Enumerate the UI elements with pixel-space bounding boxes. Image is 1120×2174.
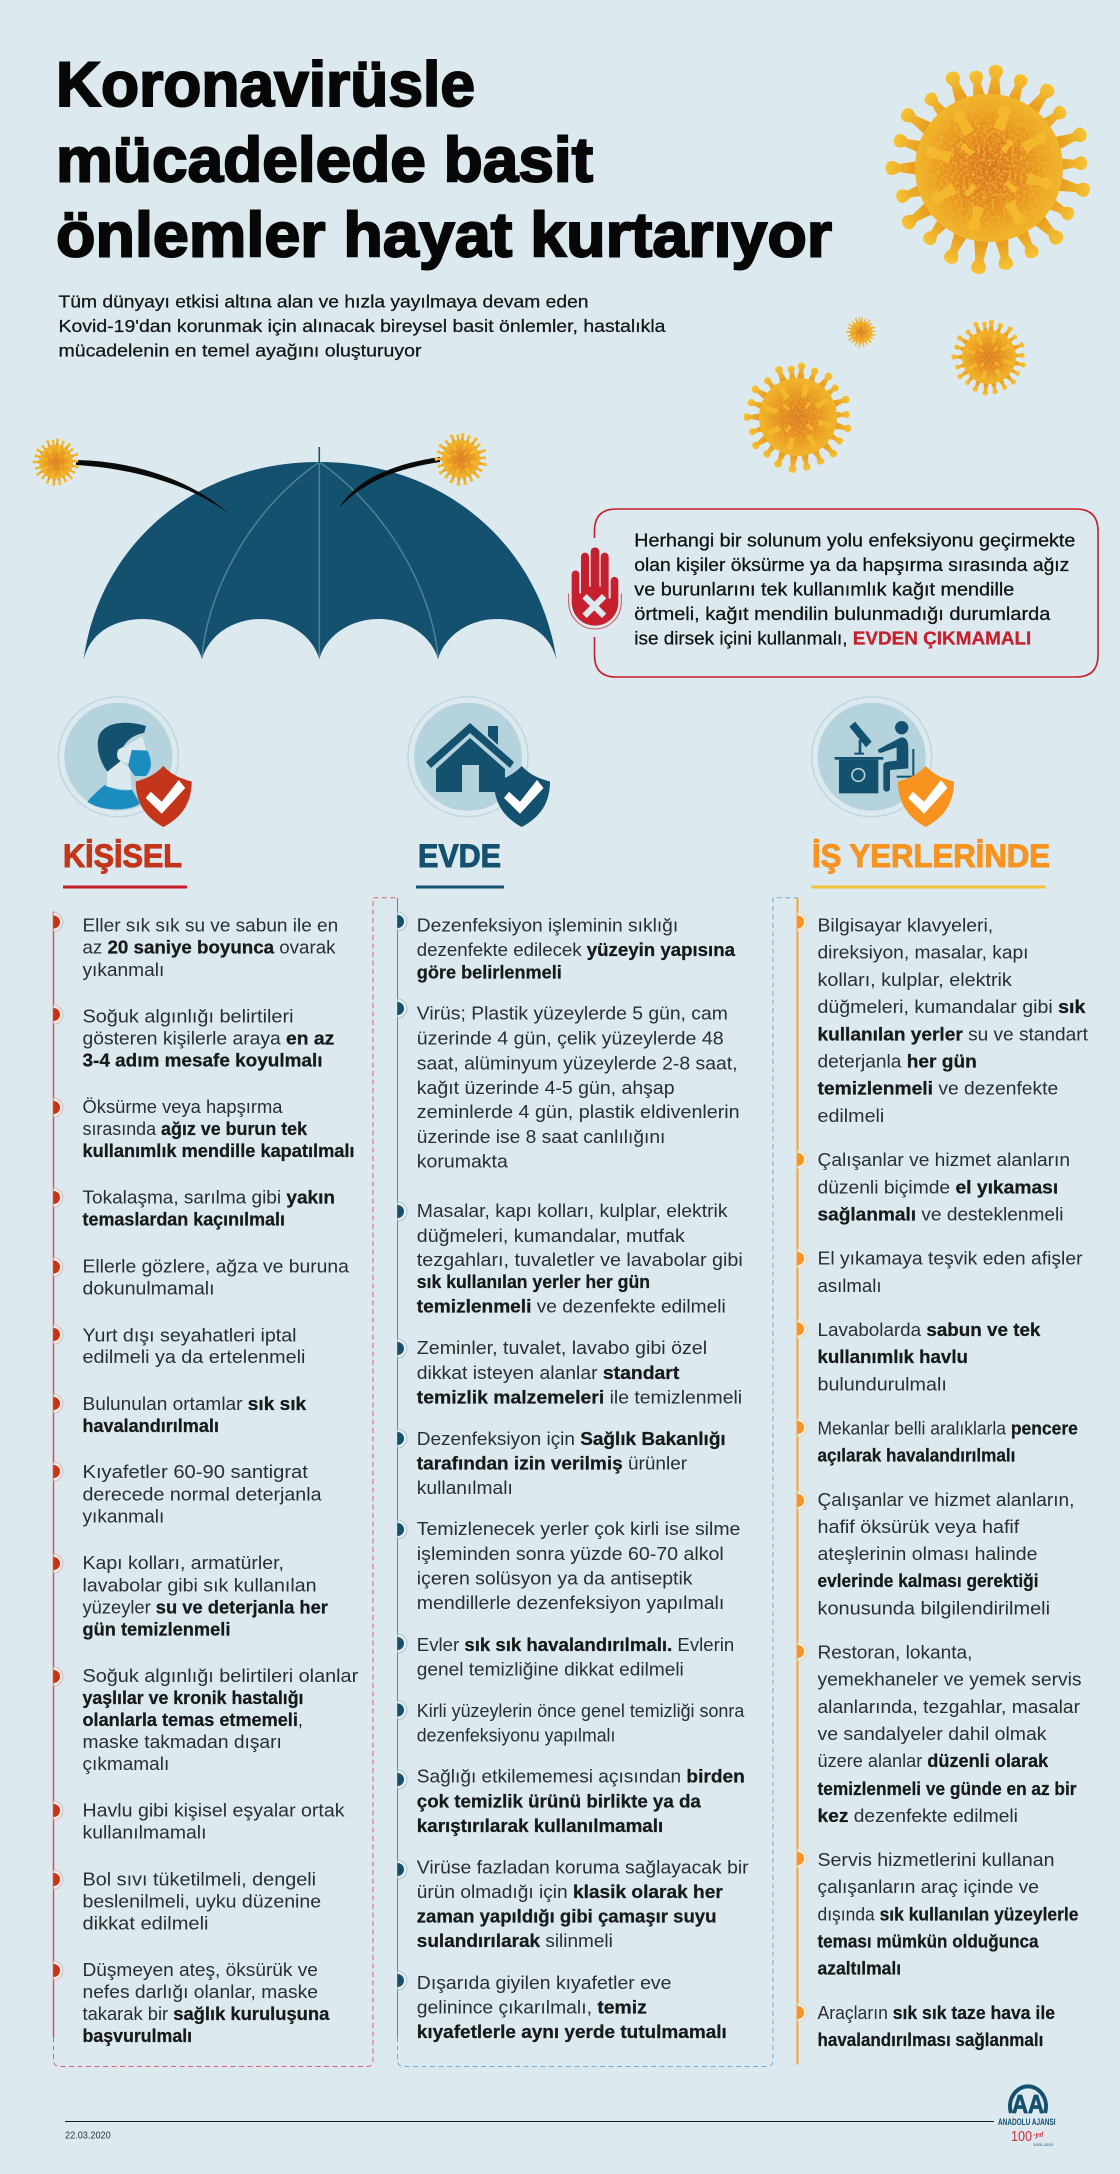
item: çok temizlik ürünü birlikte ya da [417, 1791, 702, 1811]
item: zeminlerde 4 gün, plastik eldivenlerin [417, 1102, 740, 1122]
item [398, 1700, 745, 1745]
item: kağıt üzerinde 4-5 gün, ahşap [417, 1078, 675, 1098]
item: düğmeleri, kumandalar, mutfak [417, 1226, 686, 1246]
item: Kıyafetler 60-90 santigrat [82, 1462, 308, 1482]
item: Kirli yüzeylerin önce genel temizliği sonra [417, 1701, 745, 1721]
item: Eller sık sık su ve sabun ile en [82, 915, 338, 935]
item: direksiyon, masalar, kapı [818, 943, 1028, 963]
icon: large virus [886, 64, 1092, 275]
item: kullanılmalı [417, 1478, 513, 1498]
item: havalandırılmalı [82, 1416, 219, 1436]
item: Bulunulan ortamlar sık sık [82, 1394, 307, 1414]
item: yemekhaneler ve yemek servis [818, 1670, 1082, 1690]
item [398, 1201, 743, 1317]
item: Kapı kolları, armatürler, [82, 1553, 284, 1573]
item [54, 1666, 358, 1774]
umbrella tip [318, 447, 320, 463]
item [398, 1429, 726, 1498]
panel: iş yerlerinde [798, 697, 1088, 2065]
list: iş yerlerinde [798, 912, 1088, 2050]
item: maske takmadan dışarı [82, 1732, 282, 1752]
item: Düşmeyen ateş, öksürük ve [82, 1960, 318, 1980]
item: Soğuk algınlığı belirtileri olanlar [82, 1666, 358, 1686]
item: tarafından izin verilmiş ürünler [417, 1454, 687, 1474]
item: Virüse fazladan koruma sağlayacak bir [417, 1858, 749, 1878]
item: dezenfekte edilecek yüzeyin yapısına [417, 940, 736, 960]
item: üzerinde 4 gün, çelik yüzeylerde 48 [417, 1029, 724, 1049]
item: Temizlenecek yerler çok kirli ise silme [417, 1519, 740, 1539]
icon: virus above callout [743, 362, 852, 473]
item [398, 1519, 740, 1613]
callout text: Herhangi bir solunum yolu enfeksiyonu geçirmekte [634, 531, 1075, 551]
item: Bol sıvı tüketilmeli, dengeli [82, 1870, 316, 1890]
icon: virus right on strand [435, 433, 487, 486]
item: yüzeyler su ve deterjanla her [82, 1598, 328, 1618]
item [398, 1767, 745, 1836]
item [798, 912, 1088, 1126]
item: Yurt dışı seyahatleri iptal [82, 1325, 296, 1345]
item [54, 1801, 346, 1842]
logo: Anadolu Ajansı: 1920-2020 [1033, 2142, 1054, 2147]
item: yıkanmalı [82, 960, 164, 980]
item: karıştırılarak kullanılmamalı [417, 1816, 663, 1836]
item: temizlenmeli ve dezenfekte edilmeli [417, 1297, 726, 1317]
item: havalandırılması sağlanmalı [818, 2030, 1043, 2050]
umbrella canopy [84, 462, 556, 660]
item: teması mümkün olduğunca [818, 1932, 1039, 1952]
item: asılmalı [818, 1276, 882, 1296]
intro text: Tüm dünyayı etkisi altına alan ve hızla yayılmaya devam eden [58, 292, 588, 312]
item: Soğuk algınlığı belirtileri [82, 1006, 294, 1026]
item: alanlarında, tezgahlar, masalar [818, 1697, 1080, 1717]
item [54, 1188, 335, 1230]
item [54, 1553, 328, 1639]
item: dokunulmamalı [82, 1279, 214, 1299]
date: 22.03.2020 [65, 2130, 111, 2142]
item: yaşlılar ve kronik hastalığı [82, 1688, 304, 1708]
virus strand right [339, 457, 440, 508]
item: gelinince çıkarılmalı, temiz [417, 1998, 647, 2018]
item [54, 1005, 334, 1070]
item: ateşlerinin olması halinde [818, 1544, 1038, 1564]
item [398, 912, 736, 982]
item [798, 1418, 1078, 1466]
item [798, 2003, 1055, 2050]
panel frame: kişisel [54, 898, 398, 2067]
title [56, 50, 832, 270]
item [398, 999, 740, 1172]
item: kullanımlık mendille kapatılmalı [82, 1141, 354, 1161]
item: zaman yapıldığı gibi çamaşır suyu [417, 1906, 716, 1926]
umbrella illustration [32, 433, 556, 660]
icon: office worker [812, 697, 954, 827]
item: kıyafetlerle aynı yerde tutulmamalı [417, 2022, 727, 2042]
item: deterjanla her gün [818, 1052, 977, 1072]
item: az 20 saniye boyunca ovarak [82, 938, 337, 958]
item: açılarak havalandırılmalı [818, 1446, 1015, 1466]
item: Araçların sık sık taze hava ile [818, 2003, 1055, 2023]
item: Tokalaşma, sarılma gibi yakın [82, 1188, 335, 1208]
item [398, 1858, 749, 1951]
item: derecede normal deterjanla [82, 1484, 323, 1504]
item: 3-4 adım mesafe koyulmalı [82, 1050, 322, 1070]
item: Dezenfeksiyon işleminin sıklığı [417, 915, 678, 935]
item: olanlarla temas etmemeli, [82, 1710, 303, 1730]
icon: person with mask [58, 697, 192, 827]
item: düzenli biçimde el yıkaması [818, 1178, 1058, 1198]
item: temaslardan kaçınılmalı [82, 1210, 285, 1230]
item: Dışarıda giyilen kıyafetler eve [417, 1973, 671, 1993]
virus strand left [76, 460, 229, 514]
panel: evde [398, 697, 798, 2067]
item: gün temizlenmeli [82, 1619, 230, 1639]
title: önlemler hayat kurtarıyor [56, 200, 832, 270]
callout text: ve burunlarını tek kullanımlık kağıt mendille [634, 580, 1014, 600]
icon: house [408, 697, 550, 827]
item: dikkat isteyen alanlar standart [417, 1363, 679, 1383]
item: dikkat edilmeli [82, 1913, 208, 1933]
item: nefes darlığı olanlar, maske [82, 1982, 318, 2002]
item [398, 1634, 734, 1680]
item [54, 1870, 321, 1933]
logo: Anadolu Ajansı: -yıl [1033, 2132, 1044, 2139]
icon: virus left on strand [32, 438, 79, 486]
logo: Anadolu Ajansı [998, 2086, 1056, 2147]
title: mücadelede basit [56, 126, 593, 196]
callout text: örtmeli, kağıt mendilin bulunmadığı durumlarda [634, 604, 1051, 624]
heading: evde: EVDE [418, 838, 501, 874]
item: evlerinde kalması gerektiği [818, 1571, 1038, 1591]
callout text [634, 531, 1075, 648]
item: Servis hizmetlerini kullanan [818, 1850, 1054, 1870]
item: Öksürme veya hapşırma [82, 1097, 283, 1117]
umbrella ribs [202, 447, 438, 657]
item [398, 1338, 742, 1408]
item [798, 1642, 1082, 1826]
item [54, 1394, 307, 1436]
callout: warning [569, 509, 1098, 677]
item: başvurulmalı [82, 2026, 192, 2046]
item [798, 1849, 1078, 1979]
icon: stop hand [569, 547, 621, 629]
item: kullanımlık havlu [818, 1347, 968, 1367]
item [398, 1971, 727, 2042]
intro text [58, 292, 666, 360]
logo: Anadolu Ajansı: ANADOLU AJANSI [998, 2117, 1056, 2128]
item: kullanılmamalı [82, 1822, 206, 1842]
item: Virüs; Plastik yüzeylerde 5 gün, cam [417, 1004, 728, 1024]
item [54, 1097, 354, 1161]
item: Restoran, lokanta, [818, 1642, 972, 1662]
item: Sağlığı etkilememesi açısından birden [417, 1767, 745, 1787]
item: edilmeli [818, 1106, 884, 1126]
heading underline [811, 886, 1046, 888]
item: çıkmamalı [82, 1754, 169, 1774]
panel line [796, 898, 798, 2065]
item: saat, alüminyum yüzeylerde 2-8 saat, [417, 1053, 738, 1073]
item [798, 1490, 1074, 1618]
callout text: olan kişiler öksürme ya da hapşırma sırasında ağız [634, 555, 1069, 575]
item: düğmeleri, kumandalar gibi sık [818, 997, 1086, 1017]
item: tezgahları, tuvaletler ve lavabolar gibi [417, 1250, 743, 1270]
item: temizlenmeli ve günde en az bir [818, 1779, 1076, 1799]
item: kolları, kulplar, elektrik [818, 970, 1013, 990]
item [798, 1320, 1041, 1394]
heading: kişisel: KİŞİSEL [63, 838, 182, 874]
item: mendillerle dezenfeksiyon yapılmalı [417, 1593, 724, 1613]
item: dışında sık kullanılan yüzeylerle [818, 1904, 1078, 1924]
heading underline [416, 886, 504, 888]
item: sağlanmalı ve desteklenmeli [818, 1204, 1064, 1224]
item: Dezenfeksiyon için Sağlık Bakanlığı [417, 1429, 726, 1449]
item [54, 1462, 323, 1527]
item [54, 912, 338, 980]
item [54, 1325, 305, 1367]
icon: small virus [846, 317, 876, 348]
footer [65, 2086, 1056, 2147]
item: göre belirlenmeli [417, 962, 562, 982]
logo: Anadolu Ajansı: 100 [1011, 2128, 1032, 2145]
list: evde [398, 912, 749, 2042]
footer rule [65, 2121, 994, 2122]
item: sırasında ağız ve burun tek [82, 1119, 308, 1139]
item: Lavabolarda sabun ve tek [818, 1320, 1041, 1340]
item: temizlik malzemeleri ile temizlenmeli [417, 1388, 742, 1408]
item: beslenilmeli, uyku düzenine [82, 1892, 321, 1912]
item: dezenfeksiyonu yapılmalı [417, 1725, 615, 1745]
item: konusunda bilgilendirilmeli [818, 1598, 1050, 1618]
item: El yıkamaya teşvik eden afişler [818, 1249, 1083, 1269]
item: takarak bir sağlık kuruluşuna [82, 2004, 330, 2024]
item: kullanılan yerler su ve standart [818, 1024, 1088, 1044]
item: Bilgisayar klavyeleri, [818, 915, 993, 935]
logo: Anadolu Ajansı: AA [1012, 2089, 1044, 2119]
heading underline [63, 886, 187, 888]
item: ürün olmadığı için klasik olarak her [417, 1882, 723, 1902]
item: Evler sık sık havalandırılmalı. Evlerin [417, 1635, 734, 1655]
item: Havlu gibi kişisel eşyalar ortak [82, 1801, 346, 1821]
item [798, 1249, 1083, 1296]
item: işleminden sonra yüzde 60-70 alkol [417, 1544, 724, 1564]
item: lavabolar gibi sık kullanılan [82, 1575, 316, 1595]
item: hafif öksürük veya hafif [818, 1517, 1020, 1537]
item: sulandırılarak silinmeli [417, 1931, 613, 1951]
intro text: mücadelenin en temel ayağını oluşturuyor [58, 340, 422, 360]
item [54, 1960, 330, 2046]
callout frame [594, 509, 1098, 677]
item: çalışanların araç içinde ve [818, 1877, 1039, 1897]
panel: kişisel [54, 697, 398, 2067]
item: korumakta [417, 1152, 509, 1172]
item: yıkanmalı [82, 1507, 164, 1527]
item: Ellerle gözlere, ağza ve buruna [82, 1256, 350, 1276]
item: Çalışanlar ve hizmet alanların [818, 1150, 1070, 1170]
item [798, 1150, 1070, 1224]
item: üzere alanlar düzenli olarak [818, 1751, 1049, 1771]
icon: medium virus [951, 319, 1026, 396]
item: genel temizliğine dikkat edilmeli [417, 1660, 684, 1680]
item: içeren solüsyon ya da antiseptik [417, 1568, 694, 1588]
panel frame: evde [398, 898, 798, 2067]
item: azaltılmalı [818, 1959, 901, 1979]
list: kişisel [54, 912, 358, 2046]
item: sık kullanılan yerler her gün [417, 1272, 650, 1292]
item: kez dezenfekte edilmeli [818, 1806, 1018, 1826]
item: Çalışanlar ve hizmet alanların, [818, 1490, 1074, 1510]
title: Koronavirüsle [56, 50, 475, 120]
item: bulundurulmalı [818, 1374, 947, 1394]
item: temizlenmeli ve dezenfekte [818, 1079, 1058, 1099]
item: Masalar, kapı kolları, kulplar, elektrik [417, 1201, 729, 1221]
item: gösteren kişilerle araya en az [82, 1029, 334, 1049]
item: ve sandalyeler dahil olmak [818, 1724, 1048, 1744]
item [54, 1256, 350, 1299]
item: Mekanlar belli aralıklarla pencere [818, 1419, 1078, 1439]
intro text: Kovid-19'dan korunmak için alınacak bireysel basit önlemler, hastalıkla [58, 316, 666, 336]
callout text: ise dirsek içini kullanmalı, EVDEN ÇIKMAMALI [634, 628, 1031, 648]
heading: iş yerlerinde: İŞ YERLERİNDE [812, 838, 1050, 874]
item: edilmeli ya da ertelenmeli [82, 1347, 305, 1367]
item: üzerinde ise 8 saat canlılığını [417, 1127, 665, 1147]
item: Zeminler, tuvalet, lavabo gibi özel [417, 1338, 707, 1358]
